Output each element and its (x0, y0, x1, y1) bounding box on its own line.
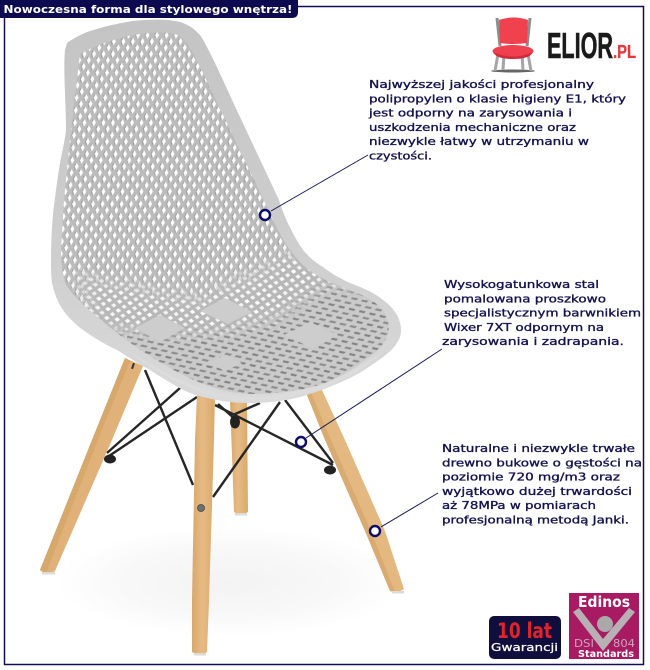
text block: profesjonalną metodą Janki. (442, 514, 629, 526)
logo: Elior.pl (491, 18, 636, 72)
seat shell (51, 20, 401, 403)
leader line (271, 155, 368, 211)
heading banner: Nowoczesna forma dla stylowego wnętrza! (4, 3, 292, 16)
text block: pomalowana proszkowo (444, 292, 606, 305)
badge: 10 years warranty: Gwarancji (491, 642, 558, 654)
back wooden leg (230, 400, 248, 516)
text block: jest odporny na zarysowania i (368, 106, 572, 120)
leader line (381, 493, 438, 527)
badge: Edinos standards: Edinos (578, 593, 630, 611)
text block: drewno bukowe o gęstości na (442, 456, 642, 469)
text block: aż 78MPa w pomiarach (442, 499, 596, 512)
mesh: holes across back and seat (61, 32, 389, 394)
text block: polipropylen o klasie higieny E1, który (369, 92, 627, 105)
marker (370, 526, 380, 536)
callout: steel (296, 278, 641, 447)
chair illustration (40, 20, 410, 656)
text block: poziomie 720 mg/m3 oraz (442, 471, 620, 484)
text block: uszkodzenia mechaniczne oraz (369, 121, 576, 134)
floor shadow (55, 527, 405, 637)
text block (442, 278, 641, 348)
solid seat patches (135, 298, 338, 371)
badge: Edinos standards (569, 593, 639, 660)
marker (296, 437, 306, 447)
text block (368, 78, 627, 162)
text block: zarysowania i zadrapania. (442, 335, 624, 348)
callout: beech wood (370, 442, 642, 536)
leader line (306, 349, 442, 438)
text block: niezwykle łatwy w utrzymaniu w (369, 135, 589, 148)
marker (260, 210, 270, 220)
right wooden leg (305, 390, 404, 594)
badge: 10 years warranty (489, 616, 561, 659)
left wooden leg (40, 358, 143, 574)
badge: Edinos standards: 804 (613, 638, 635, 650)
badge: Edinos standards: Standards (578, 649, 634, 660)
text block: Najwyższej jakości profesjonalny (369, 78, 595, 91)
logo suffix: .PL (613, 42, 636, 62)
text block: wyjątkowo dużej trwardości (442, 485, 632, 498)
badge: Edinos standards: DSI (574, 638, 594, 650)
seat front lip (120, 345, 385, 402)
text block: Wysokogatunkowa stal (444, 278, 599, 291)
text block: specjalistycznym barwnikiem (444, 307, 641, 320)
callout: polypropylene (260, 78, 627, 220)
text block: Wixer 7XT odpornym na (444, 321, 604, 334)
front wooden leg (192, 395, 215, 656)
text block (442, 442, 642, 526)
rod feet (104, 416, 336, 474)
heading banner (0, 0, 298, 18)
badge: 10 years warranty: 10 lat (497, 619, 552, 643)
text block: Naturalne i niezwykle trwałe (442, 442, 635, 455)
steel rods (107, 370, 333, 497)
text block: czystości. (369, 149, 432, 162)
icon: red chair (491, 18, 535, 72)
